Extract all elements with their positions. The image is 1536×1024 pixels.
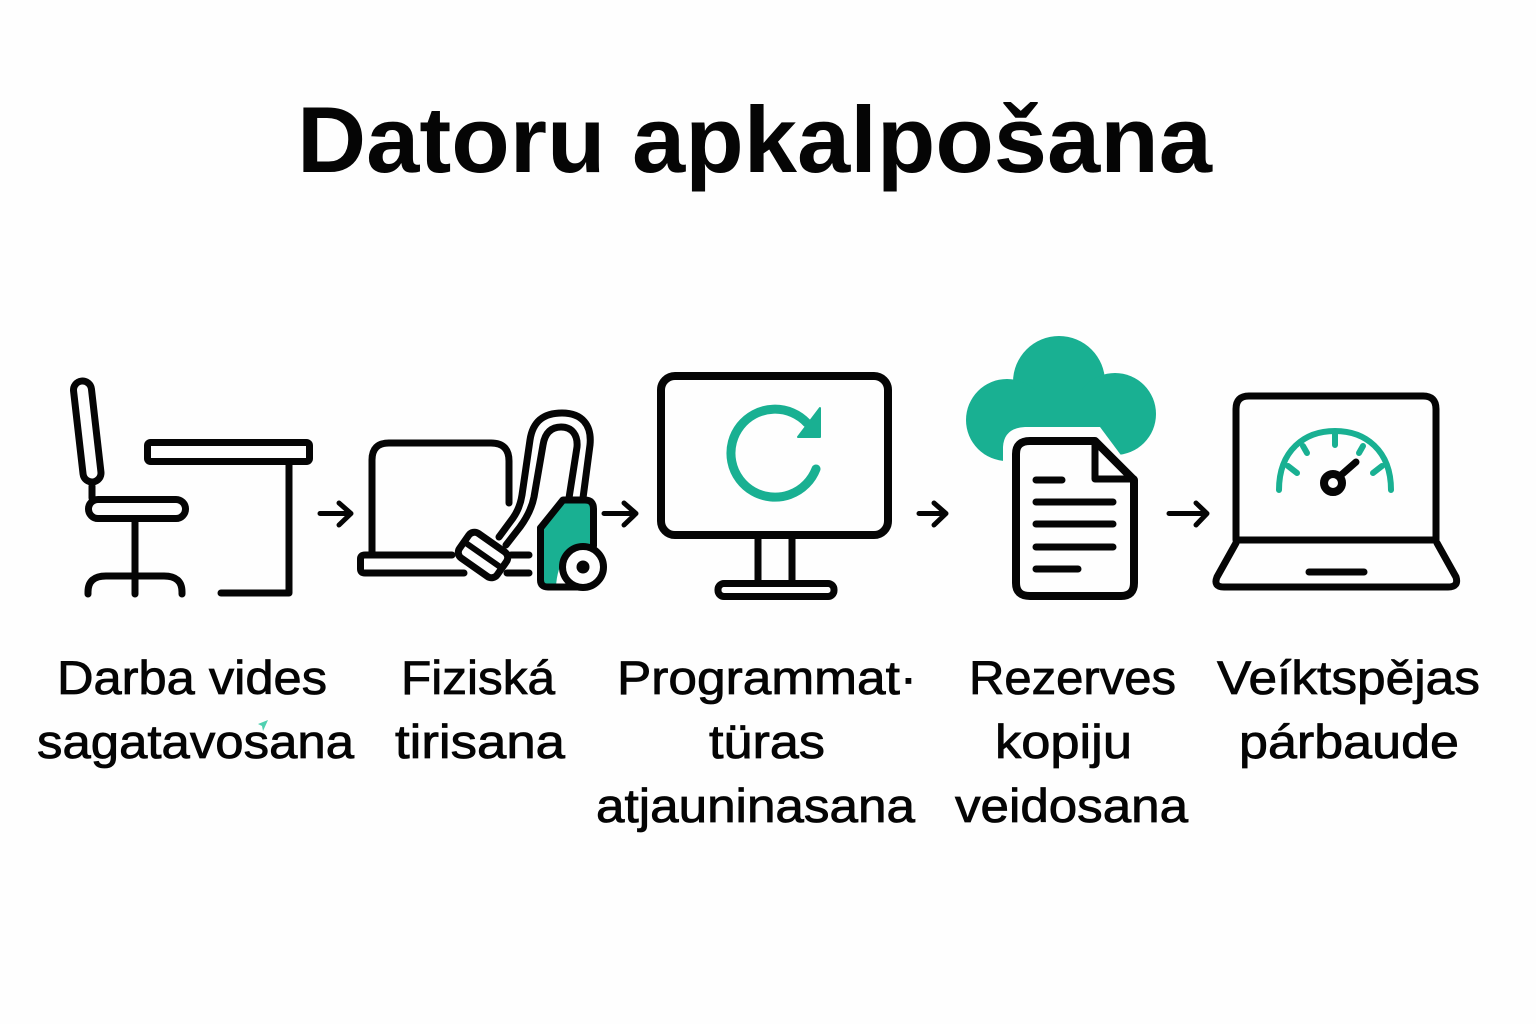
label: step 4: Rezerves — [969, 651, 1176, 704]
vacuum nozzle — [456, 530, 510, 580]
gauge — [1279, 431, 1391, 492]
vacuum wheel — [562, 546, 604, 588]
arrow 4 — [1169, 503, 1207, 525]
icon: cloud backup document — [966, 336, 1156, 596]
cloud — [966, 336, 1156, 461]
label: step 1: Darba vides — [57, 651, 327, 704]
vacuum hose — [499, 413, 590, 537]
label: step 1: sagatavosana — [37, 715, 355, 768]
label: step 4 — [955, 651, 1189, 832]
label: step 5: párbaude — [1239, 715, 1459, 768]
label: step 4: veidosana — [955, 779, 1189, 832]
label: step 5: Veíktspějas — [1217, 651, 1480, 704]
label: step 2: Fiziská — [401, 651, 556, 704]
icon: laptop and vacuum cleaner — [360, 413, 604, 588]
refresh symbol — [731, 408, 820, 497]
icon: monitor with refresh — [661, 376, 888, 596]
icon: desk and chair — [82, 390, 310, 594]
label: step 3 — [596, 651, 917, 832]
arrow 2 — [604, 503, 636, 525]
title: Datoru apkalpošana — [297, 87, 1213, 192]
label: step 2 — [395, 651, 566, 768]
arrow 3 — [919, 503, 946, 525]
document — [1016, 441, 1134, 596]
label: step 3: Programmat· — [617, 651, 917, 704]
arrow 1 — [320, 503, 351, 525]
vacuum body — [541, 500, 590, 587]
label: step 3: atjauninasana — [596, 779, 916, 832]
label: step 5 — [1217, 651, 1480, 768]
label: step 4: kopiju — [995, 715, 1132, 768]
label: step 2: tirisana — [395, 715, 566, 768]
icon: laptop with speed gauge — [1216, 396, 1457, 587]
label: step 1 — [37, 651, 355, 768]
label: step 3: türas — [709, 715, 825, 768]
